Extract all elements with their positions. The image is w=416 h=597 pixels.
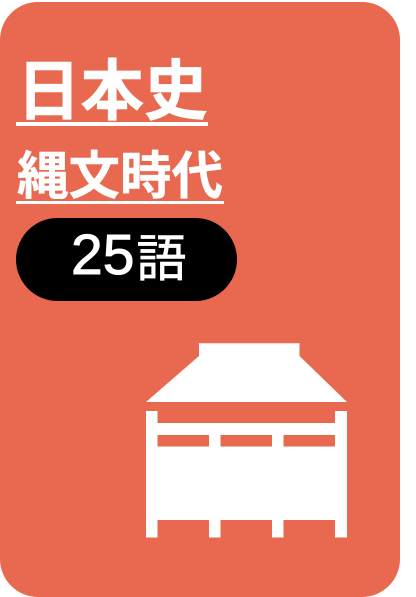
pill: word count xyxy=(16,218,237,301)
subtitle underline xyxy=(16,201,224,204)
subtitle: 縄文時代: 縄文時代 xyxy=(17,146,223,204)
word count number: 25 xyxy=(71,223,134,287)
title underline xyxy=(16,122,208,126)
title: 日本史: 日本史 xyxy=(17,55,208,128)
word count unit: 語 xyxy=(136,231,186,287)
